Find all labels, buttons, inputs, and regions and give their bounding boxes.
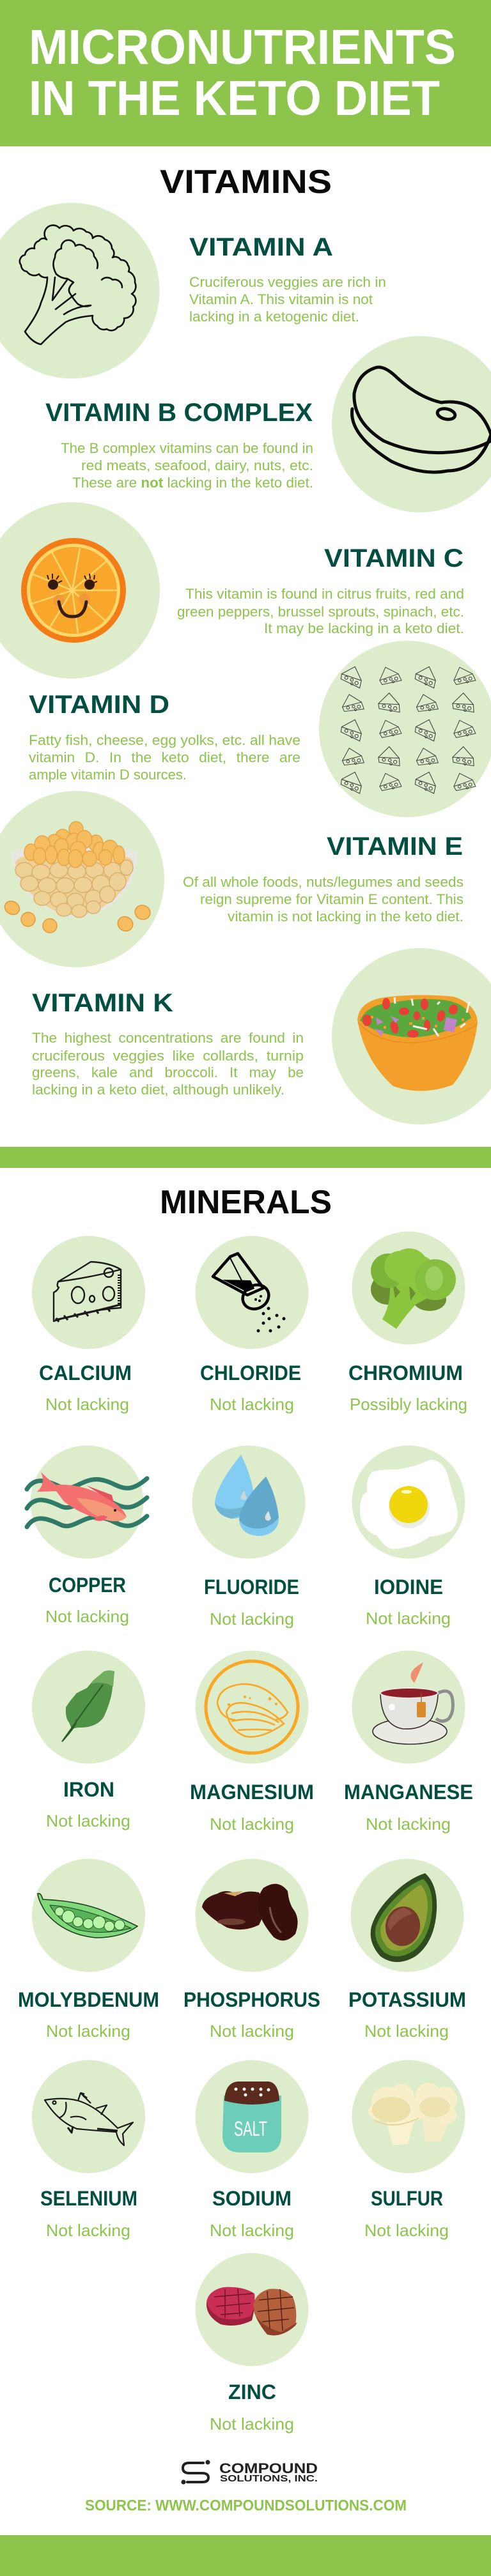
status: sodium: Not lacking: [210, 2221, 294, 2240]
mineral: molybdenum: [18, 1859, 159, 2041]
footer band: [0, 2535, 491, 2576]
text: vitamin C: [177, 586, 464, 636]
text: vitamin B: [61, 440, 313, 491]
text: vitamin D: vitamin D. In the keto diet, there are: [29, 749, 300, 765]
text: vitamin B: red meats, seafood, dairy, nuts, etc.: [81, 457, 313, 473]
label: salt: SALT: [234, 2117, 267, 2140]
text: vitamin E: [183, 874, 464, 924]
text: vitamin A: lacking in a ketogenic diet.: [189, 309, 359, 325]
status: fluoride: Not lacking: [210, 1609, 294, 1629]
panel: vitamin D: [29, 641, 491, 817]
status: phosphorus: Not lacking: [210, 2021, 294, 2041]
icon: broccoli outline: [20, 226, 136, 344]
circle: magnesium: [196, 1651, 308, 1763]
text: vitamin E: vitamin is not lacking in the keto diet.: [228, 908, 464, 924]
text: vitamin D: Fatty fish, cheese, egg yolks, etc. all have: [29, 732, 300, 748]
icon: tea cup: [373, 1662, 453, 1744]
icon: salt shaker teal: [222, 2082, 281, 2152]
icon: kidney beans: [202, 1884, 298, 1940]
icon: cheese wedge pattern: [339, 663, 476, 796]
divider band: [0, 1147, 491, 1168]
status: iodine: Not lacking: [366, 1609, 451, 1628]
name: iodine: IODINE: [374, 1575, 443, 1598]
circle: vitamin K: [332, 948, 491, 1124]
text: vitamin E: reign supreme for Vitamin E content. This: [200, 891, 464, 907]
circle: potassium: [350, 1859, 464, 1972]
status: calcium: Not lacking: [45, 1395, 129, 1414]
icon: fish and waves: [27, 1472, 147, 1527]
heading: vitamin K: VITAMIN K: [32, 989, 173, 1017]
mineral: potassium: [348, 1859, 466, 2041]
name: sulfur: SULFUR: [371, 2187, 443, 2210]
circle: manganese: [352, 1651, 465, 1763]
title: [29, 20, 456, 126]
text: vitamin B: The B complex vitamins can be found in: [61, 440, 313, 456]
circle: fluoride: [192, 1445, 306, 1559]
circle: sodium: [196, 2060, 308, 2174]
name: zinc: ZINC: [228, 2380, 276, 2404]
mineral: sulfur: [352, 2060, 465, 2240]
status: magnesium: Not lacking: [210, 1814, 294, 1834]
text: vitamin C: green peppers, brussel sprouts, spinach, etc.: [177, 604, 464, 620]
header banner: [0, 0, 491, 146]
status: chloride: Not lacking: [210, 1395, 294, 1414]
circle: sulfur: [352, 2060, 465, 2174]
text: vitamin A: Cruciferous veggies are rich in: [189, 274, 386, 290]
mineral: fluoride: [192, 1445, 306, 1629]
icon: smiling orange slice: [21, 538, 126, 643]
text: vitamin E: Of all whole foods, nuts/legumes and seeds: [183, 874, 464, 890]
text: vitamin K: lacking in a keto diet, although unlikely.: [32, 1082, 284, 1098]
mineral: chloride: [196, 1236, 308, 1414]
text: vitamin A: [189, 274, 386, 325]
icon: steak outline: [352, 367, 491, 472]
title: IN THE KETO DIET: [29, 71, 440, 126]
mineral: calcium: [32, 1236, 145, 1414]
status: selenium: Not lacking: [46, 2221, 130, 2240]
circle: selenium: [32, 2060, 145, 2174]
circle: vitamin D: [319, 641, 491, 817]
circle: vitamin E: [0, 791, 164, 967]
heading: vitamin A: VITAMIN A: [189, 233, 333, 261]
name: manganese: MANGANESE: [344, 1781, 473, 1804]
name: copper: COPPER: [49, 1574, 126, 1597]
text: vitamin D: ample vitamin D sources.: [29, 767, 187, 783]
icon: water drops: [215, 1455, 279, 1536]
panel: vitamin K: [32, 948, 491, 1124]
circle: vitamin B: [332, 336, 491, 512]
text: vitamin B: These are not lacking in the keto diet.: [72, 475, 313, 491]
mineral: iodine: [352, 1445, 465, 1628]
circle: iron: [32, 1651, 145, 1763]
text: vitamin D: [29, 732, 300, 783]
mineral: iron: [32, 1651, 145, 1830]
icon: tuna sketch: [45, 2093, 133, 2145]
text: vitamin K: The highest concentrations are found in: [32, 1030, 304, 1046]
mineral: copper: [27, 1445, 147, 1626]
name: fluoride: FLUORIDE: [204, 1575, 299, 1598]
heading: vitamin E: VITAMIN E: [327, 832, 463, 861]
icon: avocado: [371, 1873, 437, 1962]
icon: cheese sketch: [54, 1262, 121, 1322]
heading: vitamin D: VITAMIN D: [29, 691, 169, 719]
heading: vitamin C: VITAMIN C: [324, 544, 464, 572]
name: calcium: CALCIUM: [39, 1361, 132, 1384]
text: vitamin C: It may be lacking in a keto diet.: [264, 620, 464, 636]
text: vitamin A: Vitamin A. This vitamin is not: [189, 291, 373, 307]
icon: bowl of nuts: [3, 822, 152, 934]
text: vitamin K: cruciferous veggies like collards, turnip: [32, 1048, 304, 1064]
mineral: sodium: [196, 2060, 308, 2240]
heading: minerals: MINERALS: [160, 1184, 332, 1221]
mineral: manganese: [344, 1651, 473, 1834]
name: magnesium: MAGNESIUM: [190, 1781, 314, 1804]
mineral: magnesium: [190, 1651, 314, 1834]
circle: copper: [31, 1445, 143, 1559]
panel: vitamin E: [0, 791, 464, 967]
logo wordmark: SOLUTIONS, INC.: [220, 2473, 318, 2484]
status: potassium: Not lacking: [364, 2021, 449, 2041]
mineral: zinc: [196, 2253, 308, 2434]
icon: logo S mark: [182, 2461, 209, 2483]
title: MICRONUTRIENTS: [29, 20, 456, 75]
text: vitamin C: This vitamin is found in citrus fruits, red and: [185, 586, 464, 602]
name: chloride: CHLORIDE: [200, 1361, 301, 1384]
icon: almonds in ring: [206, 1661, 298, 1753]
circle: iodine: [352, 1445, 465, 1559]
circle: phosphorus: [196, 1859, 308, 1972]
name: phosphorus: PHOSPHORUS: [183, 1988, 320, 2011]
icon: leaf: [62, 1671, 114, 1742]
circle: calcium: [32, 1236, 145, 1349]
status: copper: Not lacking: [45, 1607, 129, 1626]
status: sulfur: Not lacking: [364, 2221, 449, 2240]
icon: salt shaker: [213, 1254, 285, 1333]
mineral: selenium: [32, 2060, 145, 2240]
name: sodium: SODIUM: [212, 2187, 292, 2210]
panel: vitamin B complex: [45, 336, 491, 512]
circle: chloride: [196, 1236, 308, 1349]
source line: SOURCE: WWW.COMPOUNDSOLUTIONS.COM: [85, 2497, 407, 2515]
status: molybdenum: Not lacking: [46, 2021, 130, 2041]
text: vitamin K: [32, 1030, 304, 1098]
text: vitamin K: greens, kale and broccoli. It may be: [32, 1064, 304, 1080]
mineral: chromium: [348, 1232, 467, 1414]
status: zinc: Not lacking: [210, 2414, 294, 2434]
heading: vitamin B complex: VITAMIN B COMPLEX: [45, 399, 313, 427]
status: manganese: Not lacking: [366, 1814, 451, 1834]
logo wordmark: [219, 2460, 318, 2484]
name: iron: IRON: [63, 1778, 114, 1801]
circle: vitamin C: [0, 502, 160, 678]
icon: fried egg: [360, 1460, 458, 1549]
circle: zinc: [196, 2253, 308, 2366]
logo wordmark: COMPOUND: [219, 2460, 318, 2476]
circle: molybdenum: [32, 1859, 145, 1972]
mineral: phosphorus: [183, 1859, 320, 2041]
icon: pea pod: [38, 1894, 137, 1938]
panel: vitamin C: [0, 502, 464, 678]
name: molybdenum: MOLYBDENUM: [18, 1988, 159, 2011]
name: selenium: SELENIUM: [40, 2187, 137, 2210]
heading: vitamins: VITAMINS: [160, 164, 332, 201]
name: potassium: POTASSIUM: [348, 1988, 466, 2011]
circle: chromium: [352, 1232, 465, 1344]
status: iron: Not lacking: [46, 1811, 130, 1830]
icon: salad bowl: [357, 995, 478, 1091]
icon: green broccoli: [371, 1248, 456, 1329]
logo: Compound Solutions: [182, 2460, 318, 2484]
icon: cauliflower: [368, 2083, 457, 2145]
circle: vitamin A: [0, 203, 160, 378]
icon: grilled steaks: [207, 2287, 297, 2335]
panel: vitamin A: [0, 203, 386, 378]
name: chromium: CHROMIUM: [348, 1361, 463, 1384]
status: chromium: Possibly lacking: [350, 1395, 467, 1414]
